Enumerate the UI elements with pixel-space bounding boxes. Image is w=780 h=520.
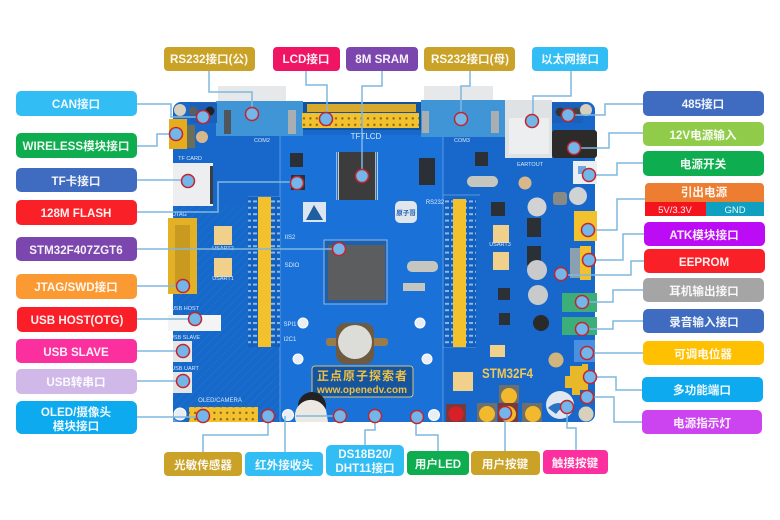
right pin header	[444, 199, 476, 347]
crystals	[403, 176, 498, 291]
label: USB SLAVE	[16, 339, 137, 363]
silkscreen labels: SPI1	[283, 322, 297, 328]
label: user button: 用户按键	[482, 457, 529, 471]
wireless module socket	[169, 119, 195, 149]
label: 12V	[643, 122, 764, 146]
label: power out	[645, 183, 764, 216]
label: RS232 male: RS232接口(公)	[170, 52, 248, 66]
label: LCD	[273, 47, 340, 71]
label: multi port	[642, 377, 763, 402]
label: STM32: STM32F407ZGT6	[29, 244, 123, 257]
label: ATK: ATK模块接口	[669, 228, 739, 242]
right labels	[642, 91, 765, 434]
label: TF card: TF卡接口	[52, 174, 100, 188]
label: light sensor: 光敏传感器	[174, 458, 232, 472]
label: JTAG	[16, 274, 137, 299]
label: headphone: 耳机输出接口	[669, 284, 739, 298]
silkscreen labels: I2C1	[284, 337, 297, 343]
silkscreen labels: SDIO	[285, 263, 300, 269]
label: mic	[643, 309, 764, 333]
label: TF card	[16, 168, 137, 192]
silkscreen labels: OLED/CAMERA	[198, 398, 242, 404]
development board	[168, 86, 597, 422]
label: LCD: LCD接口	[282, 52, 330, 66]
power out: GND segment	[706, 202, 764, 216]
user buttons	[446, 385, 542, 422]
label: headphone	[643, 278, 764, 302]
silkscreen labels: TF CARD	[178, 156, 202, 162]
label: RS232 female	[424, 47, 515, 71]
brand badge	[395, 201, 417, 223]
power jack	[552, 130, 597, 158]
label: user LED	[407, 451, 469, 475]
label: FLASH: 128M FLASH	[41, 207, 111, 220]
label: potentiometer	[643, 341, 764, 365]
MCU chip	[324, 240, 387, 304]
label: DS18B20	[326, 445, 404, 476]
board title STM32F4: STM32F4	[482, 365, 533, 381]
label: CAN: CAN接口	[52, 97, 100, 111]
label: OLED	[16, 401, 137, 434]
label: DS18B20: DS18B20/	[338, 448, 393, 461]
label: 12V: 12V电源输入	[669, 128, 737, 142]
label: WIRELESS: WIRELESS模块接口	[23, 139, 129, 153]
buzzer	[295, 392, 328, 422]
USB serial port	[173, 372, 192, 393]
logo box: brand text: 正点原子探索者	[317, 368, 407, 383]
coin battery	[326, 323, 388, 364]
brand badge: 原子哥	[396, 209, 416, 217]
silkscreen labels: USB UART	[171, 366, 199, 372]
label: WIRELESS	[16, 133, 137, 158]
label: power LED: 电源指示灯	[673, 416, 731, 430]
label: RS232 male	[164, 47, 255, 71]
label: USB HOST: USB HOST(OTG)	[31, 314, 124, 327]
label: FLASH	[16, 200, 137, 225]
label: DS18B20: DHT11接口	[335, 461, 395, 475]
label: power out: GND	[724, 205, 746, 216]
board PCB	[173, 102, 595, 422]
silkscreen labels: USART2	[212, 246, 234, 252]
power section: capacitors and connectors	[518, 176, 597, 422]
label: USB SLAVE: USB SLAVE	[43, 346, 109, 359]
silkscreen labels	[170, 132, 544, 404]
label: SRAM	[346, 47, 418, 71]
silkscreen labels: EARTOUT	[517, 162, 544, 168]
logo box: brand text	[312, 366, 413, 397]
label: ethernet	[532, 47, 608, 71]
label: user LED: 用户LED	[415, 457, 461, 471]
label: OLED: 模块接口	[53, 419, 99, 433]
label: SRAM: 8M SRAM	[355, 53, 409, 66]
silkscreen labels: IIS2	[285, 235, 296, 241]
left pin header	[248, 197, 280, 347]
label: USB serial	[16, 369, 137, 394]
OLED header	[189, 407, 258, 422]
label: EEPROM: EEPROM	[679, 256, 729, 269]
JTAG header	[168, 218, 197, 294]
label: USB HOST	[17, 307, 137, 332]
left labels	[16, 91, 137, 434]
bottom labels	[164, 445, 608, 476]
label: JTAG: JTAG/SWD接口	[34, 280, 118, 294]
label: IR receiver: 红外接收头	[255, 458, 313, 472]
ESD logo	[303, 202, 326, 222]
label: potentiometer: 可调电位器	[674, 347, 732, 361]
marker dots	[170, 108, 596, 424]
small chips	[290, 152, 541, 325]
label: ATK	[644, 222, 765, 246]
silkscreen labels: USB SLAVE	[170, 335, 200, 341]
label: OLED: OLED/摄像头	[41, 405, 112, 419]
silkscreen labels: USB HOST	[171, 306, 200, 312]
power out: 5V segment	[645, 202, 706, 216]
small jumpers	[214, 225, 509, 391]
label: user button	[471, 451, 540, 475]
silkscreen labels: USART1	[212, 276, 234, 282]
logo box: brand text: www.openedv.com	[316, 385, 407, 396]
SRAM chip	[336, 152, 378, 200]
silkscreen labels: RS232	[426, 200, 445, 206]
label: power out: 5V/3.3V	[658, 205, 693, 216]
mounting holes	[174, 318, 440, 420]
USB host port	[168, 315, 221, 331]
label: light sensor	[164, 452, 242, 476]
terminal: 485	[552, 103, 592, 123]
TF card slot	[173, 163, 213, 206]
label: mic: 录音输入接口	[669, 315, 739, 329]
label: power LED	[642, 410, 762, 434]
silkscreen labels: USART3	[489, 242, 511, 248]
top labels	[164, 47, 608, 71]
label: touch button: 触摸按键	[552, 456, 599, 470]
connector: LCD header	[302, 102, 421, 130]
connector: ethernet	[505, 100, 552, 158]
silkscreen labels: COM3	[454, 138, 470, 144]
label: power switch: 电源开关	[680, 157, 727, 171]
power switch	[573, 161, 597, 184]
label: touch button	[543, 450, 608, 474]
label: EEPROM	[644, 249, 765, 273]
label: 485	[643, 91, 764, 116]
USB slave port	[173, 341, 192, 362]
silkscreen labels: TFTLCD	[351, 132, 382, 141]
label: CAN	[16, 91, 137, 116]
touch logo	[546, 391, 574, 419]
silkscreen labels: COM2	[254, 138, 270, 144]
label: STM32	[16, 237, 137, 261]
terminal: CAN	[174, 103, 217, 143]
silkscreen labels: JTAG	[173, 212, 187, 218]
label: USB serial: USB转串口	[46, 375, 106, 389]
label: RS232 female: RS232接口(母)	[431, 52, 509, 66]
connector: RS232 female	[421, 86, 505, 137]
label: 485: 485接口	[682, 97, 724, 111]
label: ethernet: 以太网接口	[541, 52, 599, 66]
label: power out: 引出电源	[681, 185, 728, 199]
label: multi port: 多功能端口	[673, 383, 731, 397]
label: IR receiver	[245, 452, 323, 476]
connector: RS232 male	[216, 86, 303, 136]
label: power switch	[643, 151, 764, 176]
leader lines	[137, 71, 645, 452]
